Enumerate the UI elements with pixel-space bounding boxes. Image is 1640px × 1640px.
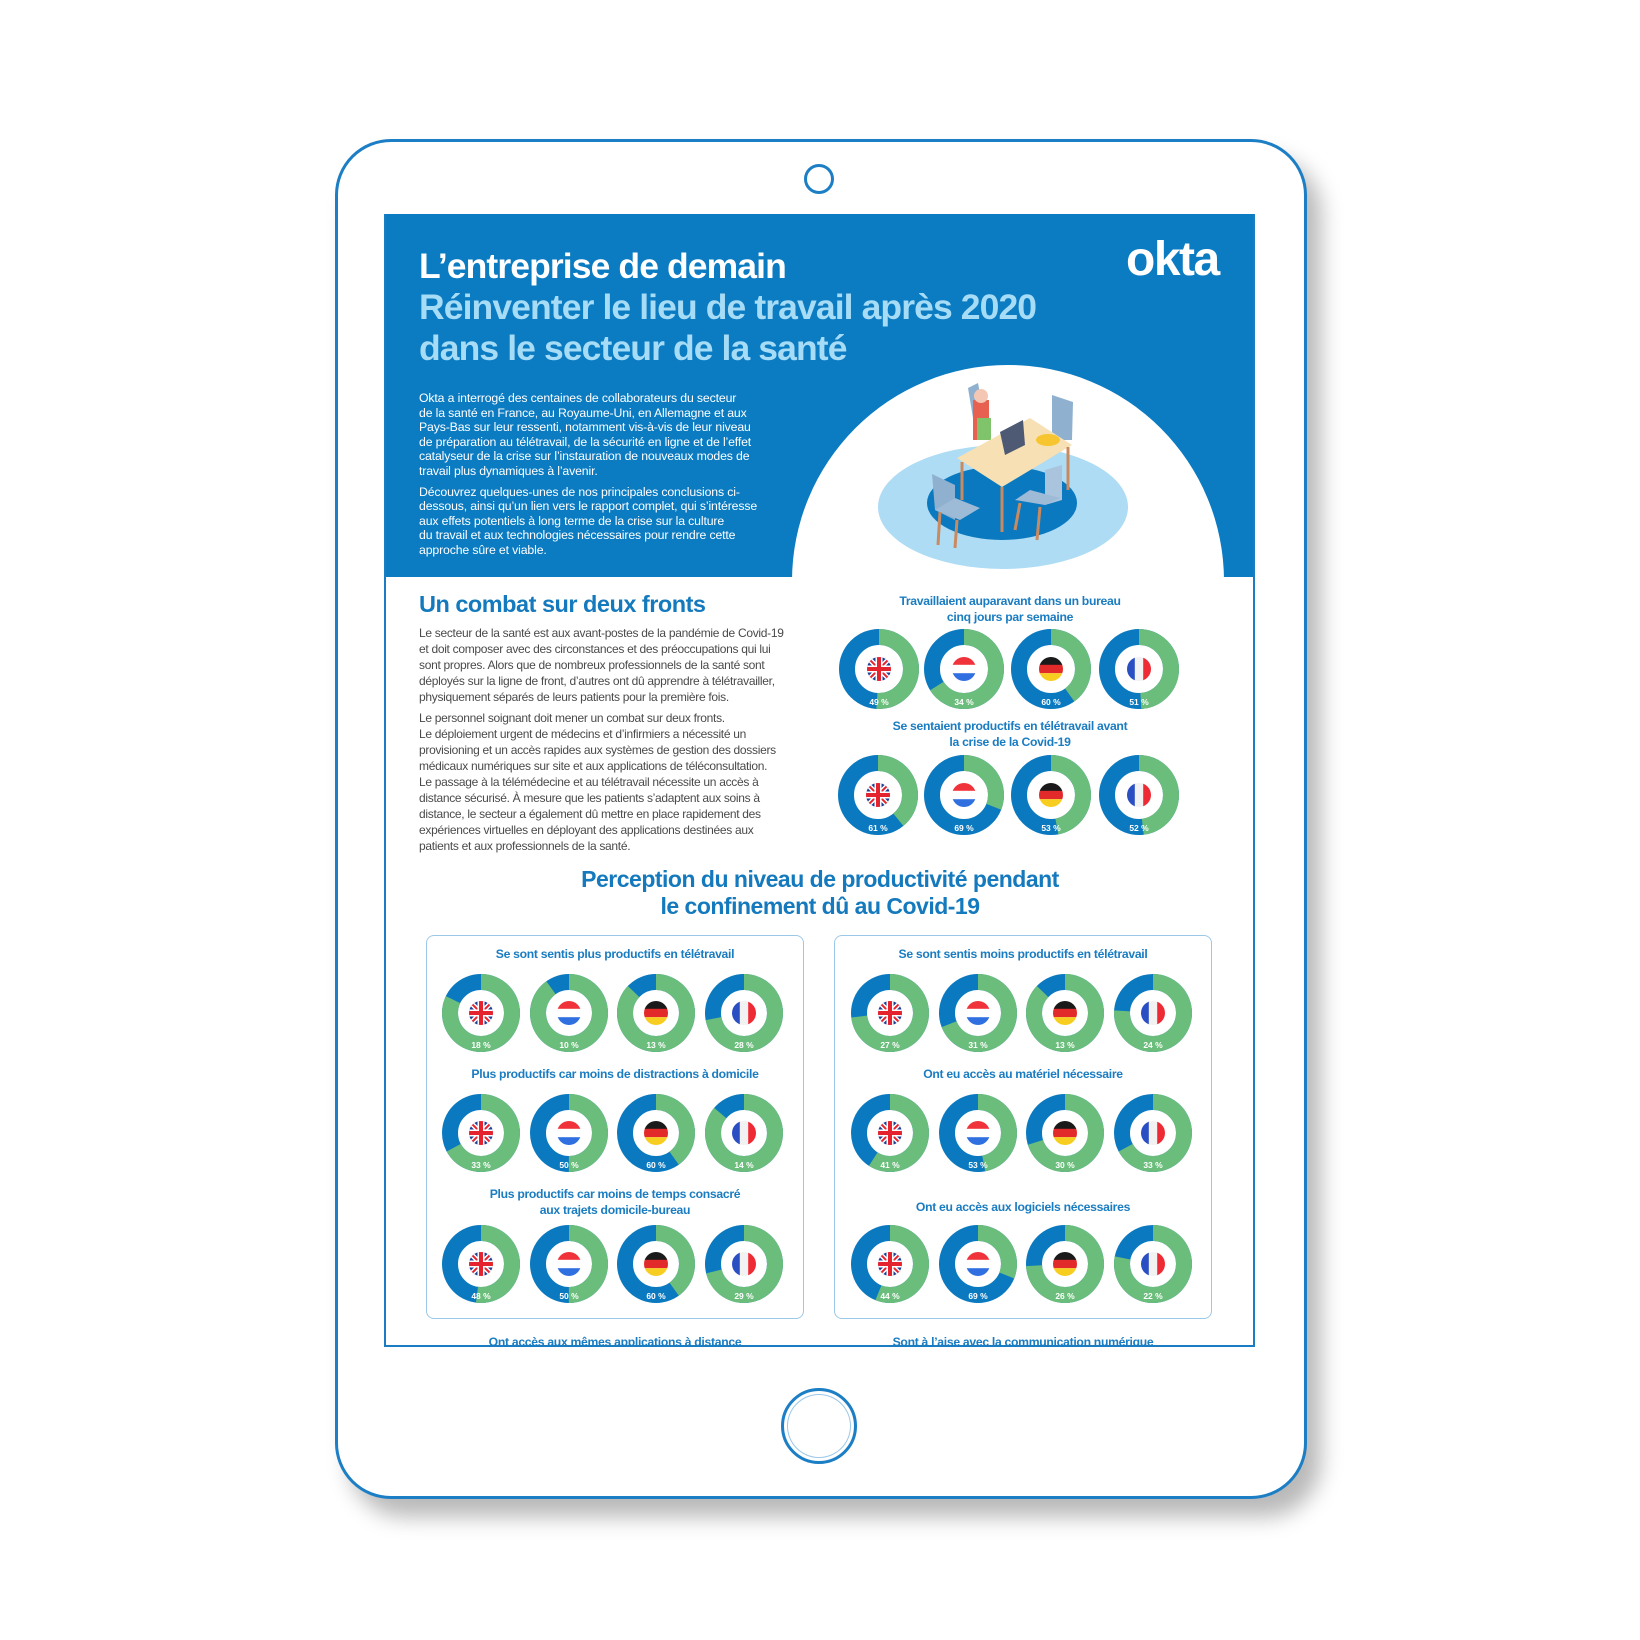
intro text: du travail et aux technologies nécessaires pour rendre cette: [419, 528, 735, 542]
body text: déployés sur la ligne de front, d’autres ont dû apprendre à télétravailler,: [419, 674, 775, 688]
donut: UK 61%: [846, 763, 910, 833]
intro text: travail plus dynamiques à l’avenir. Découvrez quelques-unes de nos principales conclusions ci-: [419, 464, 740, 499]
intro text: [419, 391, 757, 557]
donut: L3 DE 60%: [625, 1233, 687, 1301]
donut: DE 53%: 53 %: [1041, 823, 1061, 833]
donut: NL 34%: [932, 637, 996, 707]
donut: L2 FR 14%: [713, 1102, 775, 1170]
donut: L2 DE 60%: [625, 1102, 687, 1170]
intro text: dessous, ainsi qu’un lien vers le rapport complet, qui s’intéresse: [419, 499, 757, 513]
row title L1: Se sont sentis plus productifs en télétravail: [496, 947, 734, 961]
donut: FR 52%: [1107, 763, 1171, 833]
donut: DE 53%: [1019, 763, 1083, 833]
intro text: catalyseur de la crise sur l’instauration de nouveaux modes de: [419, 449, 749, 463]
panel: left: [426, 935, 804, 1319]
heading: Perception: le confinement dû au Covid-19: [660, 893, 980, 919]
donut: L1 NL 10%: [538, 982, 600, 1050]
donut: R3 FR 22%: [1122, 1233, 1184, 1301]
donut: R3 NL 69%: [947, 1233, 1009, 1301]
donut: L1 UK 18%: [450, 982, 512, 1050]
body text: distance, le secteur a également dû mettre en place rapidement des: [419, 807, 761, 821]
donut: L1 FR 28%: 28 %: [734, 1040, 754, 1050]
row title R1: Se sont sentis moins productifs en télétravail: [898, 947, 1147, 961]
donut: UK 49%: [847, 637, 911, 707]
donut: L1 DE 13%: 13 %: [646, 1040, 666, 1050]
donut: L3 UK 48%: [450, 1233, 512, 1301]
donut: FR 52%: 52 %: [1129, 823, 1149, 833]
donut: R2 FR 33%: [1122, 1102, 1184, 1170]
chart title: productive before: [893, 719, 1128, 748]
donut: L2 UK 33%: 33 %: [471, 1160, 491, 1170]
donut: R2 NL 53%: 53 %: [968, 1160, 988, 1170]
donut: L3 FR 29%: [713, 1233, 775, 1301]
donut: L2 FR 14%: 14 %: [734, 1160, 754, 1170]
heading: Perception: Perception du niveau de productivité pendant: [581, 866, 1059, 892]
donut: DE 60%: 60 %: [1041, 697, 1061, 707]
donut: R3 DE 26%: 26 %: [1055, 1291, 1075, 1301]
donut: R2 DE 30%: 30 %: [1055, 1160, 1075, 1170]
title: dans le secteur de la santé: [419, 328, 847, 368]
donut: R1 DE 13%: [1034, 982, 1096, 1050]
body text: distance sécurisé. À mesure que les patients s’adaptent aux soins à: [419, 791, 760, 805]
row title L3: aux trajets domicile-bureau: [540, 1202, 690, 1216]
row title R3: Ont eu accès aux logiciels nécessaires: [916, 1200, 1130, 1214]
chart title: office: [899, 594, 1121, 624]
logo: okta: okta: [1126, 233, 1219, 286]
donut: FR 51%: [1107, 637, 1171, 707]
body text: expériences virtuelles en déployant des applications destinées aux: [419, 823, 753, 837]
donut: R1 NL 31%: 31 %: [968, 1040, 988, 1050]
donut: FR 51%: 51 %: [1129, 697, 1149, 707]
intro text: Okta a interrogé des centaines de collaborateurs du secteur: [419, 391, 736, 405]
donut: R2 UK 41%: [859, 1102, 921, 1170]
donut: R2 FR 33%: 33 %: [1143, 1160, 1163, 1170]
intro text: approche sûre et viable.: [419, 543, 547, 557]
donut: R1 NL 31%: [947, 982, 1009, 1050]
donut: NL 69%: [932, 763, 996, 833]
donut: L2 NL 50%: [538, 1102, 600, 1170]
row title L3: [490, 1187, 740, 1216]
donut: UK 61%: 61 %: [868, 823, 888, 833]
heading: Perception: [581, 866, 1059, 919]
donut: L1 DE 13%: [625, 982, 687, 1050]
donut: R1 DE 13%: 13 %: [1055, 1040, 1075, 1050]
donut: L3 UK 48%: 48 %: [471, 1291, 491, 1301]
heading: Un combat sur deux fronts: Un combat sur deux fronts: [419, 591, 706, 617]
donut: R2 DE 30%: [1034, 1102, 1096, 1170]
donut: DE 60%: [1019, 637, 1083, 707]
body text: patients et aux professionnels de la santé.: [419, 839, 630, 853]
chart title: office: Travaillaient auparavant dans un bureau: [899, 594, 1121, 608]
body text: Le passage à la télémédecine et au télétravail nécessite un accès à: [419, 775, 758, 789]
icon: camera: [804, 164, 834, 194]
donut: L3 DE 60%: 60 %: [646, 1291, 666, 1301]
body text: physiquement séparés de leurs patients pour la première fois. Le personnel soignant doit mener un combat sur deux fronts.: [419, 690, 729, 725]
donut: R3 UK 44%: [859, 1233, 921, 1301]
donut: R3 DE 26%: [1034, 1233, 1096, 1301]
donut: NL 69%: 69 %: [954, 823, 974, 833]
title: [419, 246, 1036, 368]
body text: sont propres. Alors que de nombreux professionnels de la santé sont: [419, 658, 764, 672]
body text: [419, 626, 784, 853]
donut: L3 NL 50%: 50 %: [559, 1291, 579, 1301]
row title L2: Plus productifs car moins de distractions à domicile: [471, 1067, 759, 1081]
screen: [384, 214, 1255, 1347]
donut: R1 UK 27%: 27 %: [880, 1040, 900, 1050]
donut: R3 FR 22%: 22 %: [1143, 1291, 1163, 1301]
tablet frame: [335, 139, 1307, 1499]
donut: L1 FR 28%: [713, 982, 775, 1050]
donut: R1 UK 27%: [859, 982, 921, 1050]
intro text: aux effets potentiels à long terme de la crise sur la culture: [419, 514, 724, 528]
donut: L1 UK 18%: 18 %: [471, 1040, 491, 1050]
row title L3: Plus productifs car moins de temps consacré: [490, 1187, 740, 1201]
body text: Le secteur de la santé est aux avant-postes de la pandémie de Covid-19: [419, 626, 784, 640]
donut: R3 NL 69%: 69 %: [968, 1291, 988, 1301]
intro text: de la santé en France, au Royaume-Uni, en Allemagne et aux: [419, 406, 747, 420]
body text: provisioning et un accès rapides aux systèmes de gestion des dossiers: [419, 743, 776, 757]
donut: L2 DE 60%: 60 %: [646, 1160, 666, 1170]
panel: right: [834, 935, 1212, 1319]
donut: R1 FR 24%: [1122, 982, 1184, 1050]
donut: R2 UK 41%: 41 %: [880, 1160, 900, 1170]
donut: R2 NL 53%: [947, 1102, 1009, 1170]
chart title: productive before: la crise de la Covid-19: [949, 734, 1071, 748]
header band: [384, 214, 1255, 577]
donut charts: [442, 629, 1192, 1303]
body text: médicaux numériques sur site et aux applications de téléconsultation.: [419, 759, 767, 773]
dome background: [792, 365, 1224, 797]
chart title: office: cinq jours par semaine: [947, 610, 1073, 624]
donut: NL 34%: 34 %: [954, 697, 974, 707]
body text: Le déploiement urgent de médecins et d’infirmiers a nécessité un: [419, 727, 746, 741]
donut: UK 49%: 49 %: [869, 697, 889, 707]
body text: et doit composer avec des circonstances et des préoccupations qui lui: [419, 642, 771, 656]
donut: L2 NL 50%: 50 %: [559, 1160, 579, 1170]
intro text: de préparation au télétravail, de la sécurité en ligne et de l’effet: [419, 435, 751, 449]
donut: L3 NL 50%: [538, 1233, 600, 1301]
donut: R1 FR 24%: 24 %: [1143, 1040, 1163, 1050]
icon: home button: [781, 1388, 857, 1464]
donut: L2 UK 33%: [450, 1102, 512, 1170]
title: Réinventer le lieu de travail après 2020: [419, 287, 1036, 327]
row title R2: Ont eu accès au matériel nécessaire: [923, 1067, 1123, 1081]
donut: R3 UK 44%: 44 %: [880, 1291, 900, 1301]
title: L’entreprise de demain: [419, 246, 786, 286]
donut: L3 FR 29%: 29 %: [734, 1291, 754, 1301]
donut: L1 NL 10%: 10 %: [559, 1040, 579, 1050]
chart title: productive before: Se sentaient productifs en télétravail avant: [893, 719, 1127, 733]
intro text: Pays-Bas sur leur ressenti, notamment vis-à-vis de leur niveau: [419, 420, 751, 434]
